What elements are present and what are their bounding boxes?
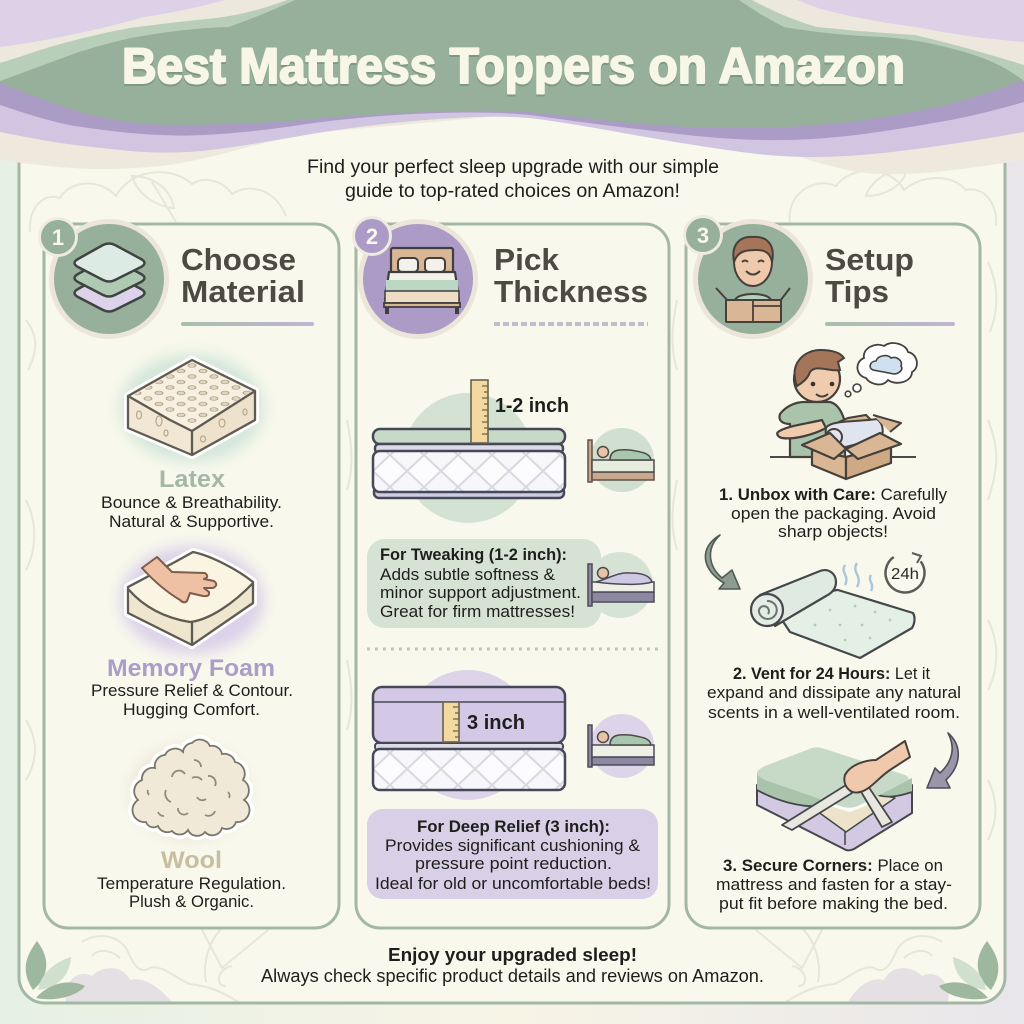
- text: step 2: scents in a well-ventilated room.: [708, 704, 960, 722]
- text: step 1: [719, 486, 948, 541]
- ruler: 3 inch: [443, 702, 459, 742]
- label: latex: Latex: [159, 466, 226, 493]
- callout: for tweaking: Great for firm mattresses!: [380, 603, 575, 621]
- title: Best Mattress Toppers on Amazon: [122, 38, 905, 94]
- callout: for tweaking: [367, 539, 654, 628]
- callout: for deep relief: Ideal for old or uncomfortable beds!: [375, 875, 651, 893]
- label: memory foam: Pressure Relief & Contour.: [91, 682, 293, 700]
- illustration: person unboxing topper: [770, 343, 917, 479]
- callout: for deep relief: Provides significant cushioning &: [385, 837, 640, 855]
- text: step 2: expand and dissipate any natural: [707, 684, 961, 702]
- footer text: Always check specific product details and reviews on Amazon.: [261, 966, 764, 986]
- icon: bed in circle: [358, 219, 478, 339]
- illustration: 1-2 inch topper on mattress: 1-2 inch: [495, 394, 569, 417]
- icon: latex block: [120, 354, 264, 462]
- icon: sleeper on bed, purple: [588, 564, 654, 606]
- text: step 3: 3. Secure Corners: Place on: [723, 857, 943, 875]
- illustration: securing strap on mattress corner: [757, 741, 912, 850]
- icon: person with box in circle: [693, 219, 813, 339]
- label: wool: Wool: [161, 847, 222, 874]
- step badge 1: 1: [52, 225, 64, 250]
- label: memory foam: Hugging Comfort.: [123, 701, 260, 719]
- subtitle: guide to top-rated choices on Amazon!: [345, 181, 680, 202]
- step badge 3: 3: [697, 223, 709, 248]
- step badge 2: [352, 216, 392, 256]
- text: step 1: open the packaging. Avoid: [731, 505, 936, 523]
- panel: choose material: [38, 217, 339, 928]
- subtitle: [307, 157, 719, 202]
- icon: wool tuft: [130, 740, 250, 840]
- text: step 3: put fit before making the bed.: [719, 895, 948, 913]
- arrow: step 2 to step 3: [927, 733, 958, 788]
- label: latex: [101, 466, 282, 531]
- heading: setup tips: [825, 242, 914, 309]
- illustration: 1-2 inch topper on mattress: [373, 380, 569, 523]
- heading: pick thickness: Pick: [494, 242, 560, 277]
- illustration: rolled topper venting: [751, 546, 932, 658]
- label: wool: Plush & Organic.: [129, 893, 254, 911]
- text: step 2: 2. Vent for 24 Hours: Let it: [733, 665, 930, 683]
- icon: 24h clock: 24h: [891, 566, 919, 583]
- header banner waves: [0, 0, 1024, 174]
- icon: 24h clock: [878, 546, 932, 600]
- callout: for tweaking: minor support adjustment.: [380, 584, 581, 602]
- panel: pick thickness: [352, 216, 669, 928]
- label: latex: Bounce & Breathability.: [101, 494, 282, 512]
- label: memory foam: Memory Foam: [107, 655, 275, 682]
- callout: for tweaking: For Tweaking (1-2 inch):: [380, 546, 567, 564]
- icon: sleeper on bed, brown: [588, 428, 654, 492]
- heading: setup tips: Tips: [825, 274, 889, 309]
- step badge 1: [38, 217, 78, 257]
- callout: for deep relief: [367, 809, 658, 899]
- bottom decoration: soft clouds and leaves: [26, 928, 998, 1002]
- illustration: 3 inch topper on mattress: [373, 670, 565, 800]
- label: wool: Temperature Regulation.: [97, 875, 286, 893]
- footer text: Enjoy your upgraded sleep!: [388, 945, 637, 965]
- text: step 2: [707, 665, 961, 722]
- arrow: step 1 to step 2: [705, 535, 740, 589]
- ruler: 1-2 inch: [471, 380, 488, 443]
- heading: setup tips: Setup: [825, 242, 914, 277]
- heading: pick thickness: [494, 242, 648, 309]
- text: step 3: [716, 857, 952, 913]
- thought bubble: [845, 343, 917, 397]
- label: memory foam: [91, 655, 293, 719]
- label: latex: Natural & Supportive.: [109, 513, 274, 531]
- icon: stacked layers in circle: [49, 219, 169, 339]
- step badge 3: [683, 215, 723, 255]
- callout: for deep relief: pressure point reduction.: [415, 855, 612, 873]
- icon: sleeper on bed, deep: [588, 714, 654, 778]
- subtitle: Find your perfect sleep upgrade with our simple: [307, 157, 719, 178]
- footer text: [261, 945, 764, 986]
- text: step 1: sharp objects!: [778, 523, 888, 541]
- heading: choose material: Choose: [181, 242, 296, 277]
- heading: choose material: Material: [181, 274, 305, 309]
- illustration: 3 inch topper on mattress: 3 inch: [467, 711, 525, 734]
- icon: memory foam with hand: [120, 546, 264, 654]
- heading: pick thickness: Thickness: [494, 274, 648, 309]
- background cloud outlines: [26, 168, 996, 840]
- text: step 3: mattress and fasten for a stay-: [716, 876, 952, 894]
- panel: setup tips: [683, 215, 980, 928]
- callout: for deep relief: For Deep Relief (3 inch):: [417, 818, 610, 836]
- label: wool: [97, 847, 286, 911]
- heading: choose material: [181, 242, 305, 309]
- step badge 2: 2: [366, 224, 378, 249]
- callout: for tweaking: Adds subtle softness &: [380, 566, 555, 584]
- text: step 1: 1. Unbox with Care: Carefully: [719, 486, 948, 504]
